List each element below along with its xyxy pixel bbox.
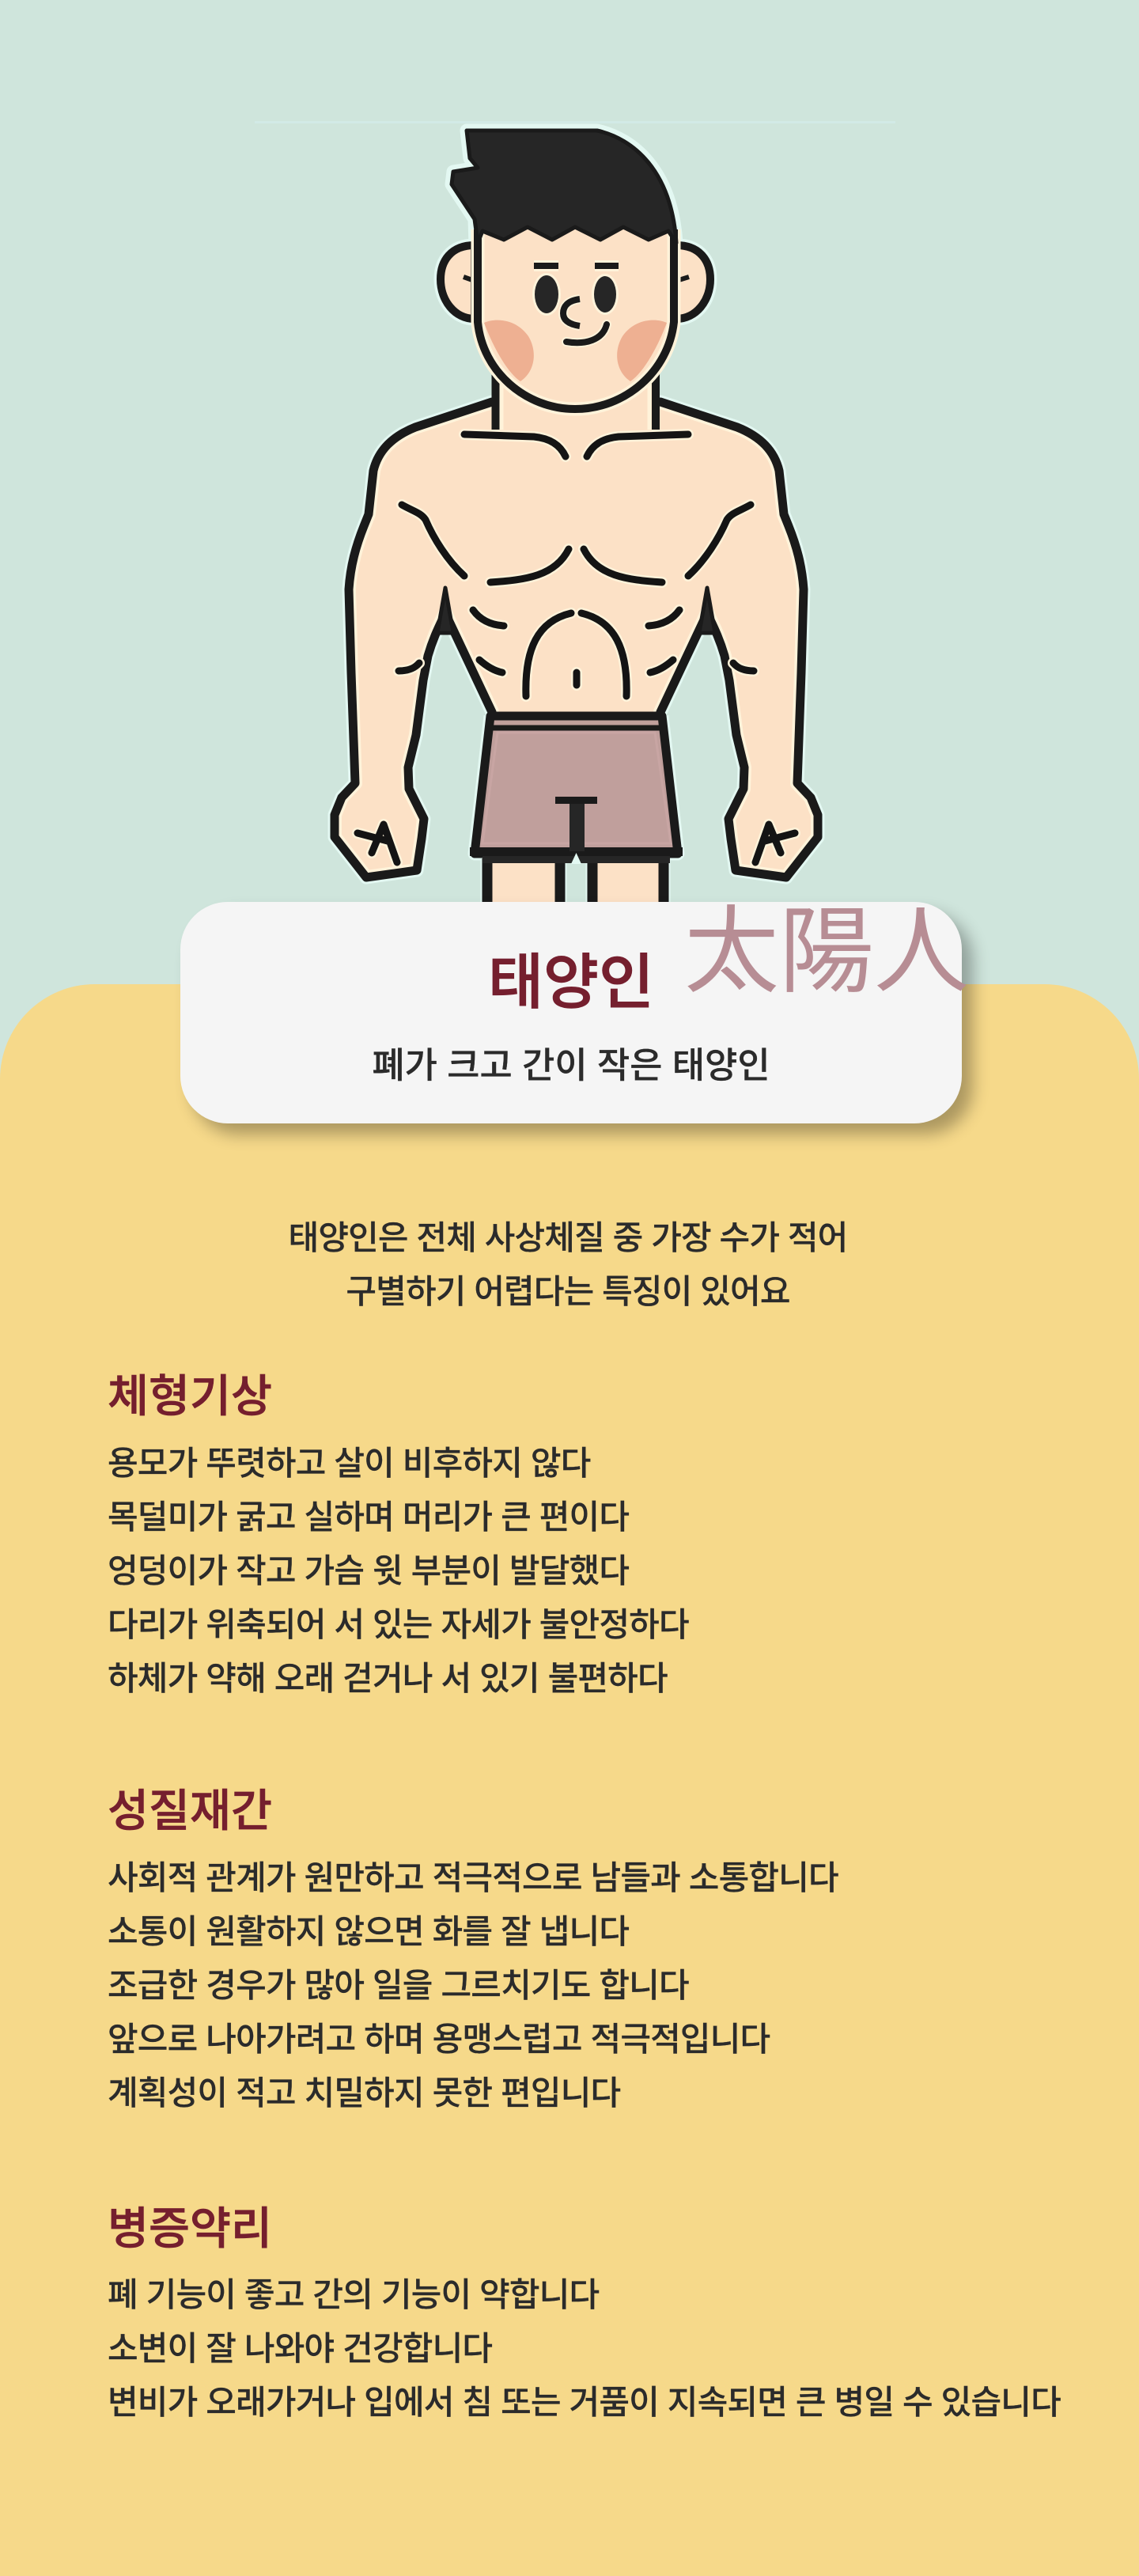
cheeks: [484, 320, 667, 381]
text block: 성질재간: [108, 1859, 838, 2112]
text block: 체형기상: 목덜미가 굵고 실하며 머리가 큰 편이다: [108, 1498, 629, 1536]
heading: 병증약리: 병증약리: [108, 2203, 272, 2253]
text block: 성질재간: 소통이 원활하지 않으면 화를 잘 냅니다: [108, 1913, 629, 1950]
text block: 체형기상: [108, 1445, 689, 1697]
panel: yellow background: [0, 984, 1139, 2576]
figure halo: [335, 131, 818, 906]
text block: 성질재간: 사회적 관계가 원만하고 적극적으로 남들과 소통합니다: [108, 1859, 838, 1896]
heading: 성질재간: 성질재간: [108, 1786, 272, 1835]
mouth: [566, 324, 607, 343]
illustration: taeyangin character: [335, 131, 818, 910]
body: [335, 402, 818, 877]
text block: 병증약리: 소변이 잘 나와야 건강합니다: [108, 2330, 492, 2367]
text block: 병증약리: 폐 기능이 좋고 간의 기능이 약합니다: [108, 2276, 599, 2313]
text block: 체형기상: 엉덩이가 작고 가슴 윗 부분이 발달했다: [108, 1552, 629, 1589]
intro text: 구별하기 어렵다는 특징이 있어요: [346, 1273, 790, 1310]
text block: 체형기상: 하체가 약해 오래 걷거나 서 있기 불편하다: [108, 1660, 668, 1697]
text block: 성질재간: 앞으로 나아가려고 하며 용맹스럽고 적극적입니다: [108, 2021, 770, 2058]
nose: [563, 299, 580, 326]
text block: 체형기상: 용모가 뚜렷하고 살이 비후하지 않다: [108, 1445, 591, 1482]
text block: 성질재간: 계획성이 적고 치밀하지 못한 편입니다: [108, 2074, 620, 2112]
heading: 체형기상: 체형기상: [108, 1371, 272, 1421]
text block: 성질재간: 조급한 경우가 많아 일을 그르치기도 합니다: [108, 1967, 689, 2004]
shorts: [470, 715, 683, 864]
neck: [495, 364, 656, 435]
hair: [452, 131, 676, 243]
muscle lines: [358, 434, 795, 862]
intro text: [289, 1219, 847, 1310]
subtitle: 폐가 크고 간이 작은 태양인: [372, 1046, 770, 1085]
eyebrows: [534, 260, 619, 271]
hanja watermark: 太陽人: [684, 899, 969, 1005]
panel: title card: [180, 902, 962, 1123]
intro text: 태양인은 전체 사상체질 중 가장 수가 적어: [289, 1219, 847, 1256]
text block: 병증약리: 변비가 오래가거나 입에서 침 또는 거품이 지속되면 큰 병일 수 있습니다: [108, 2384, 1061, 2421]
legs: [487, 858, 664, 910]
text block: 체형기상: 다리가 위축되어 서 있는 자세가 불안정하다: [108, 1606, 689, 1643]
faint line: [255, 121, 895, 123]
head: [478, 229, 674, 409]
text block: 병증약리: [108, 2276, 1061, 2421]
title: 태양인: [488, 949, 654, 1017]
ears: [441, 245, 710, 319]
eyes: [532, 273, 561, 316]
